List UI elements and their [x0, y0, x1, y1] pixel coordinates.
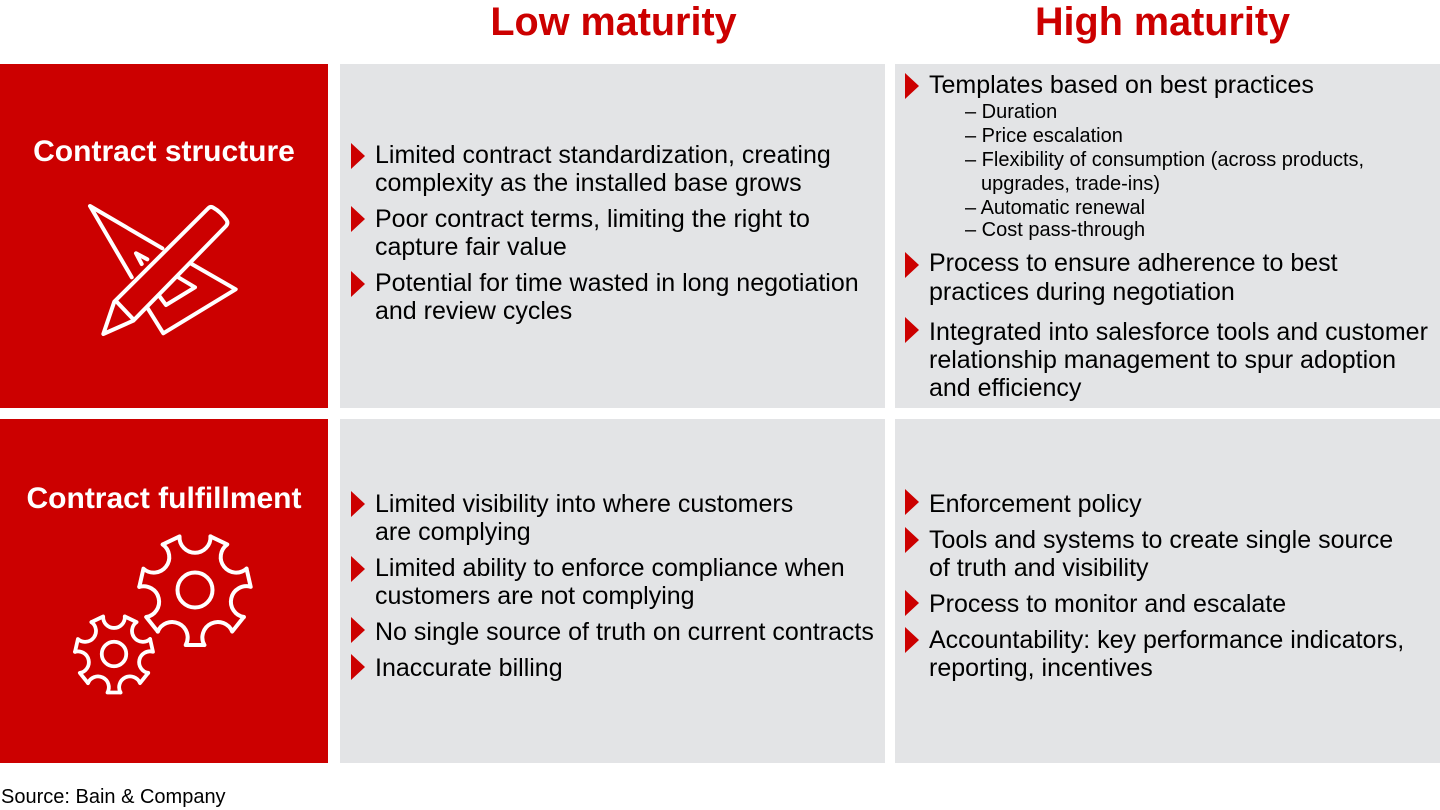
- bullet: limited visibility: [351, 490, 793, 546]
- bullet: tools and systems: of truth and visibility: [929, 554, 1149, 582]
- heading: contract structure: Contract structure: [33, 135, 295, 168]
- bullet: limited enforcement: customers are not complying: [375, 582, 695, 610]
- bullet: poor contract terms: Poor contract terms, limiting the right to: [375, 205, 810, 233]
- bullet: limited standardization: complexity as the installed base grows: [375, 169, 802, 197]
- bullet: accountability: [905, 626, 1404, 682]
- bullet: integrated tools: [905, 317, 1428, 402]
- bullet: enforcement policy: Enforcement policy: [929, 490, 1142, 518]
- bullet: templates: Templates based on best practices: [929, 71, 1314, 99]
- bullet: time wasted: [351, 269, 859, 325]
- panel: high maturity, contract fulfillment: [895, 419, 1440, 763]
- bullet: time wasted: Potential for time wasted in long negotiation: [375, 269, 859, 297]
- bullet: limited standardization: Limited contract standardization, creating: [375, 141, 831, 169]
- bullet: process adherence: Process to ensure adherence to best: [929, 249, 1338, 277]
- bullet: integrated tools: Integrated into salesforce tools and customer: [929, 318, 1428, 346]
- sub-list: template terms: – Cost pass-through: [965, 219, 1145, 241]
- bullet: limited enforcement: Limited ability to enforce compliance when: [375, 554, 845, 582]
- bullet: inaccurate billing: Inaccurate billing: [375, 654, 563, 682]
- panel: low maturity, contract structure: [340, 64, 885, 408]
- panel: low maturity, contract fulfillment: [340, 419, 885, 763]
- panel: contract structure label: [0, 64, 328, 408]
- sub-list: template terms: [965, 101, 1364, 241]
- bullet: process adherence: practices during negotiation: [929, 278, 1235, 306]
- bullet: tools and systems: Tools and systems to create single source: [929, 526, 1393, 554]
- bullet: poor contract terms: capture fair value: [375, 233, 567, 261]
- bullet: time wasted: and review cycles: [375, 297, 572, 325]
- bullet: integrated tools: and efficiency: [929, 374, 1081, 402]
- icon: gears: [73, 534, 253, 694]
- heading: low maturity: Low maturity: [490, 0, 737, 44]
- bullet: limited visibility: are complying: [375, 518, 531, 546]
- sub-list: template terms: – Automatic renewal: [965, 197, 1145, 219]
- bullet: accountability: reporting, incentives: [929, 654, 1153, 682]
- source note: Source: Bain & Company: [1, 786, 226, 808]
- bullet: poor contract terms: [351, 205, 810, 261]
- bullet: limited enforcement: [351, 554, 845, 610]
- panel: high maturity, contract structure: [895, 64, 1440, 408]
- sub-list: template terms: – Flexibility of consumption (across products,: [965, 149, 1364, 171]
- heading: high maturity: High maturity: [1035, 0, 1290, 44]
- heading: contract fulfillment: Contract fulfillment: [26, 482, 302, 515]
- sub-list: template terms: – Price escalation: [965, 125, 1123, 147]
- bullet: integrated tools: relationship management to spur adoption: [929, 346, 1396, 374]
- sub-list: template terms: upgrades, trade-ins): [981, 173, 1160, 195]
- bullet: accountability: Accountability: key performance indicators,: [929, 626, 1404, 654]
- bullet: tools and systems: [905, 526, 1393, 582]
- icon: pencil and rulers: [88, 204, 238, 336]
- bullet: limited standardization: [351, 141, 831, 197]
- panel: contract fulfillment label: [0, 419, 328, 763]
- bullet: no single source: No single source of truth on current contracts: [375, 618, 874, 646]
- bullet: monitor and escalate: Process to monitor and escalate: [929, 590, 1286, 618]
- bullet: process adherence: [905, 249, 1338, 306]
- sub-list: template terms: – Duration: [965, 101, 1057, 123]
- bullet: limited visibility: Limited visibility into where customers: [375, 490, 793, 518]
